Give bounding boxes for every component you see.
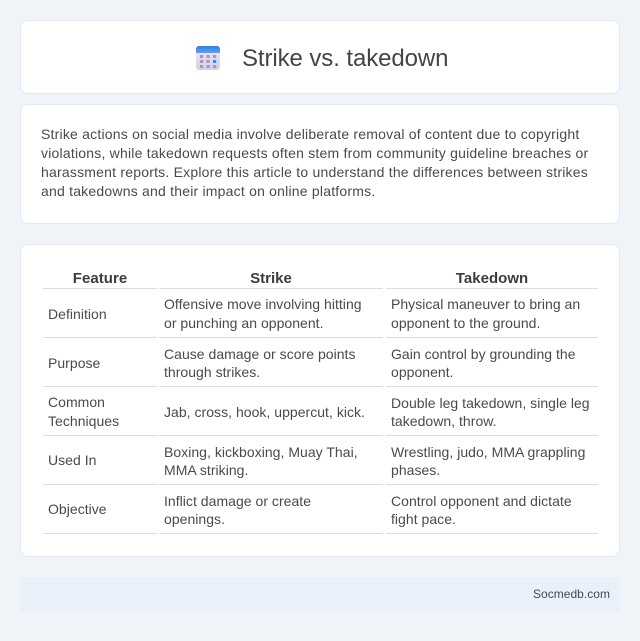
table header: Takedown bbox=[456, 270, 528, 287]
row: objective: Objective bbox=[48, 501, 107, 517]
icon: calendar bbox=[196, 46, 220, 70]
title: Strike vs. takedown bbox=[242, 45, 448, 72]
row: objective: fight pace. bbox=[391, 511, 456, 527]
row: definition: opponent to the ground. bbox=[391, 315, 540, 331]
row: purpose: Cause damage or score points bbox=[164, 346, 356, 362]
row: used in: Wrestling, judo, MMA grappling bbox=[391, 444, 585, 460]
row: purpose: Purpose bbox=[48, 355, 100, 371]
row: purpose bbox=[43, 346, 598, 387]
footer bbox=[20, 577, 620, 611]
table header: Feature bbox=[73, 270, 127, 287]
row: definition: or punching an opponent. bbox=[164, 315, 324, 331]
table header bbox=[43, 270, 598, 289]
row: objective bbox=[43, 493, 598, 534]
text block: introduction: violations, while takedown requests often stem from community guideline breaches or bbox=[41, 145, 588, 161]
row: common techniques: takedown, throw. bbox=[391, 413, 497, 429]
row: used in bbox=[43, 444, 598, 485]
text block: introduction bbox=[41, 126, 588, 199]
row: definition: Physical maneuver to bring an bbox=[391, 296, 580, 312]
row: purpose: opponent. bbox=[391, 364, 454, 380]
row: purpose: Gain control by grounding the bbox=[391, 346, 576, 362]
row: used in: Boxing, kickboxing, Muay Thai, bbox=[164, 444, 358, 460]
text block: introduction: Strike actions on social media involve deliberate removal of content due to copyright bbox=[41, 126, 579, 142]
row: objective: openings. bbox=[164, 511, 225, 527]
row: definition: Definition bbox=[48, 306, 107, 322]
row: purpose: through strikes. bbox=[164, 364, 260, 380]
row: objective: Control opponent and dictate bbox=[391, 493, 572, 509]
row: common techniques: Techniques bbox=[48, 413, 119, 429]
row: used in: Used In bbox=[48, 452, 96, 468]
row: common techniques: Double leg takedown, single leg bbox=[391, 395, 590, 411]
panel: introduction bbox=[20, 104, 620, 224]
row: common techniques: Jab, cross, hook, uppercut, kick. bbox=[164, 404, 365, 420]
row: objective: Inflict damage or create bbox=[164, 493, 311, 509]
table bbox=[43, 270, 598, 534]
panel: header bbox=[20, 20, 620, 94]
row: definition: Offensive move involving hitting bbox=[164, 296, 362, 312]
row: common techniques bbox=[43, 394, 598, 436]
footer credit: Socmedb.com bbox=[533, 587, 610, 601]
row: used in: phases. bbox=[391, 462, 440, 478]
panel: comparison table bbox=[20, 244, 620, 557]
table header: Strike bbox=[250, 270, 292, 287]
row: used in: MMA striking. bbox=[164, 462, 248, 478]
row: common techniques: Common bbox=[48, 394, 105, 410]
text block: introduction: harassment reports. Explore this article to understand the differences between strikes bbox=[41, 164, 588, 180]
text block: introduction: and takedowns and their impact on online platforms. bbox=[41, 183, 375, 199]
row: definition bbox=[43, 296, 598, 338]
